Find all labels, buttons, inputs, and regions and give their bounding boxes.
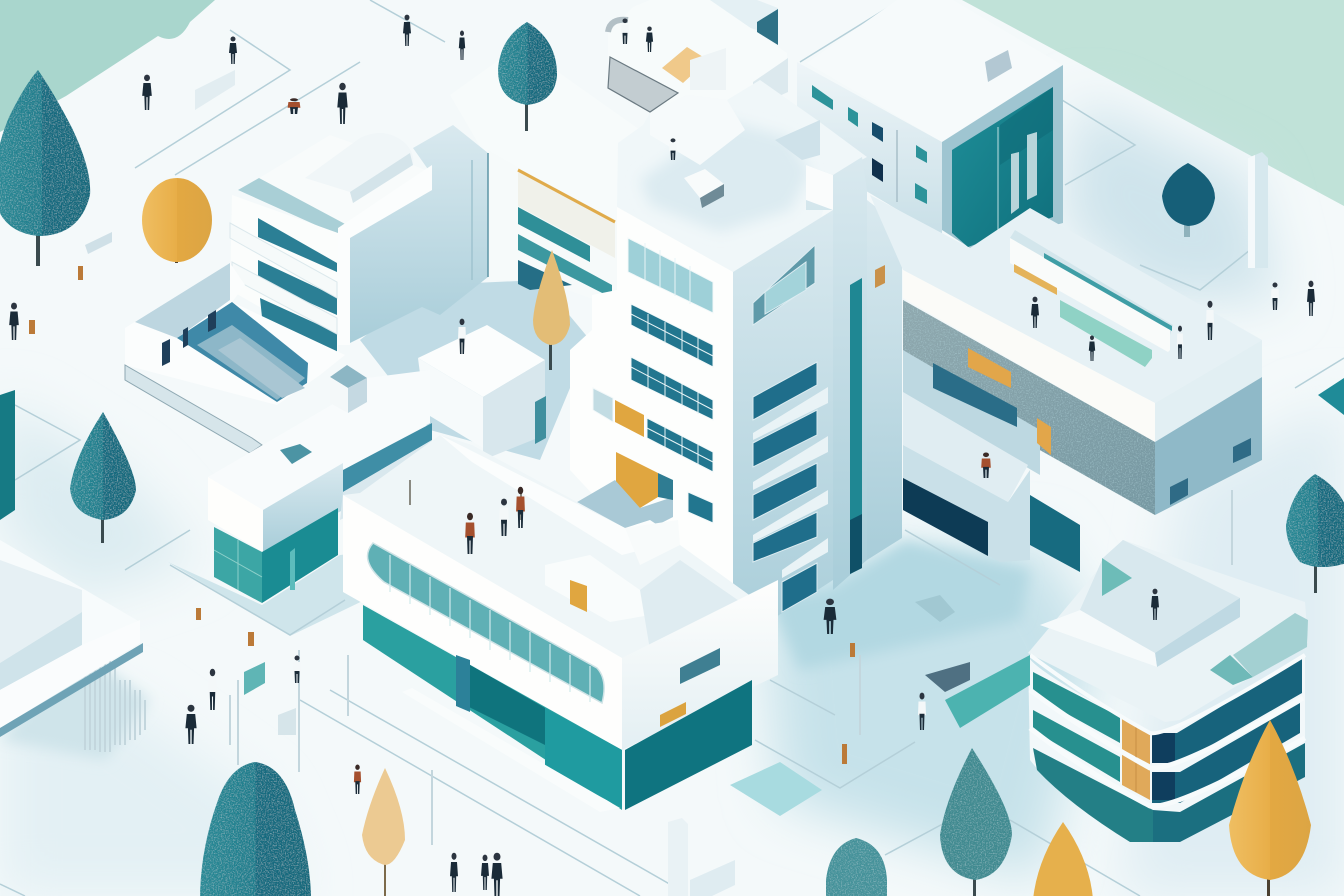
people: rooftops — [458, 18, 1214, 620]
building: left courtyard block — [125, 263, 345, 453]
tree: bottom right orange — [1229, 720, 1311, 896]
building: rear long wing — [450, 45, 640, 300]
tree: bottom orange cone — [1033, 822, 1093, 896]
building: lower left terraces — [0, 540, 143, 737]
tower left windows — [593, 238, 713, 523]
tree: top right — [1162, 163, 1215, 237]
small bollards — [29, 266, 855, 764]
tower right windows — [753, 245, 817, 612]
building: right wing with textured facade — [870, 195, 1262, 515]
building: left edge glass sliver — [0, 390, 15, 520]
people: top left plaza — [142, 15, 465, 124]
building: left terraced block — [230, 125, 488, 352]
tower faces — [570, 207, 733, 645]
tree: pale orange courtyard — [533, 250, 570, 370]
plaza posts and fence — [85, 490, 1232, 845]
tree: mid left — [70, 412, 136, 543]
building: main tower — [570, 80, 902, 645]
building: lower right rounded block — [1028, 540, 1308, 842]
tree: orange left — [142, 178, 212, 263]
tree: large bottom left — [200, 762, 311, 896]
corner: mint background left — [0, 0, 215, 132]
tree: top centre — [498, 22, 557, 131]
building: small cube — [418, 325, 546, 460]
people: right and bottom plaza — [354, 281, 1315, 896]
tower balconies — [753, 387, 828, 578]
tree: bottom small teal — [826, 838, 887, 896]
corner: mint background right — [962, 0, 1344, 206]
glass ramp and benches — [244, 378, 1344, 816]
building: top centre pavilion — [608, 0, 788, 112]
tree: large left — [0, 70, 90, 266]
tower columns — [806, 157, 902, 590]
people: left side — [9, 303, 301, 744]
building: top right glass block — [797, 0, 1063, 248]
building: front main block — [343, 435, 778, 812]
tower orange panels — [615, 400, 658, 508]
tower entrance courtyard — [572, 480, 673, 540]
building: teal base block — [208, 365, 432, 603]
tree: bottom centre conifer — [940, 748, 1012, 896]
building: right wing annex — [903, 392, 1080, 572]
tree: right edge — [1286, 474, 1344, 593]
tree: pale orange bottom — [362, 768, 405, 896]
